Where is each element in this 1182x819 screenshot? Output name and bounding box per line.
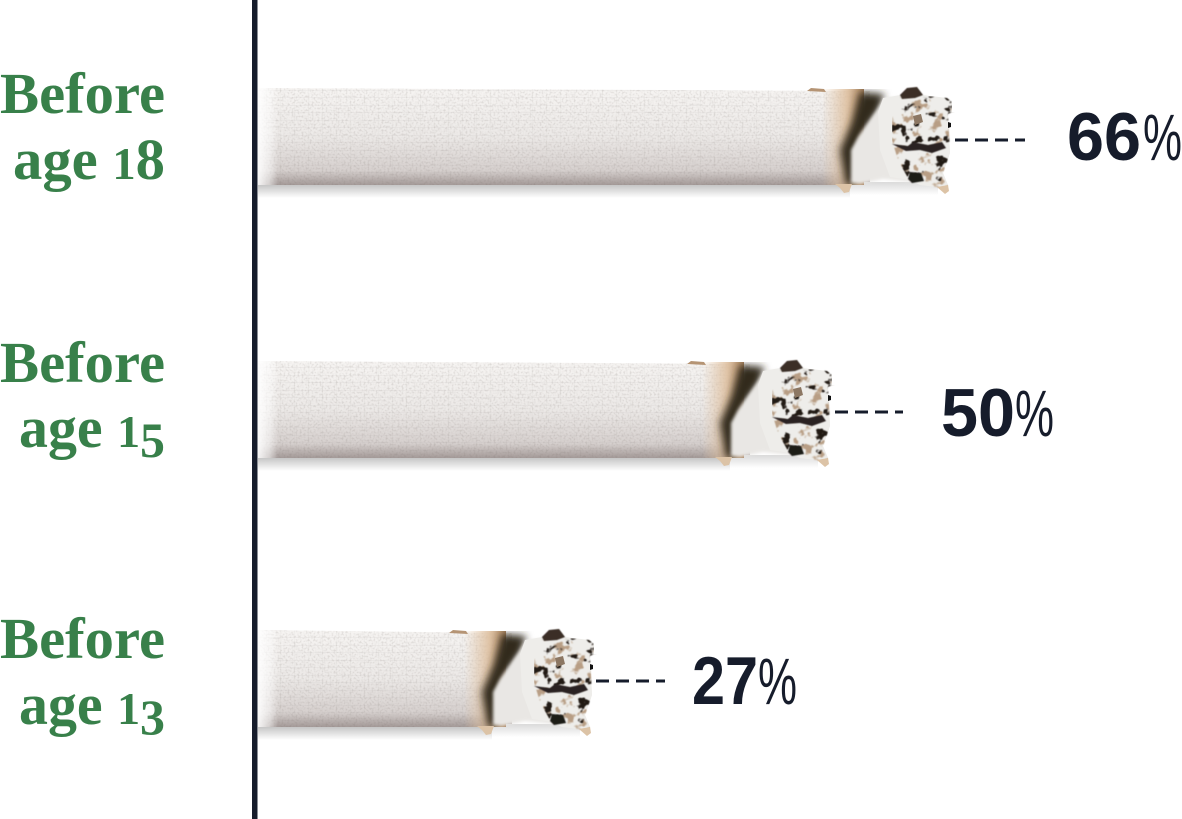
- dashed leader: [596, 680, 665, 682]
- value: 27%: 27: [692, 643, 758, 719]
- cigarette: 66%: [258, 87, 955, 198]
- row: before age 15: [0, 330, 1054, 471]
- cigarette: 27%: [258, 629, 597, 740]
- cigarette: 50%: [258, 360, 835, 471]
- label: before age 18: [0, 61, 165, 192]
- row: before age 13: [0, 606, 797, 745]
- label: before age 15: 5: [140, 412, 165, 468]
- value: 66%: [1067, 99, 1182, 175]
- label: before age 13: 3: [140, 689, 165, 745]
- label: before age 13: Before: [0, 606, 165, 671]
- label: before age 15: Before: [0, 330, 165, 395]
- label: before age 13: age 1: [19, 672, 140, 737]
- label: before age 15: age 1: [19, 395, 140, 460]
- row: before age 18: [0, 61, 1182, 198]
- label: before age 18: Before: [0, 61, 165, 126]
- vertical axis: [252, 0, 258, 819]
- value: 50%: [941, 375, 1054, 451]
- label: before age 18: age 18: [13, 127, 165, 192]
- value: 50%: %: [1015, 376, 1054, 450]
- value: 50%: 50: [941, 375, 1015, 451]
- label: before age 15: [0, 330, 165, 468]
- dashed leader: [955, 138, 1025, 142]
- label: before age 13: [0, 606, 165, 745]
- value: 27%: %: [758, 644, 797, 718]
- dashed leader: [835, 410, 903, 414]
- value: 66%: 66: [1067, 99, 1141, 175]
